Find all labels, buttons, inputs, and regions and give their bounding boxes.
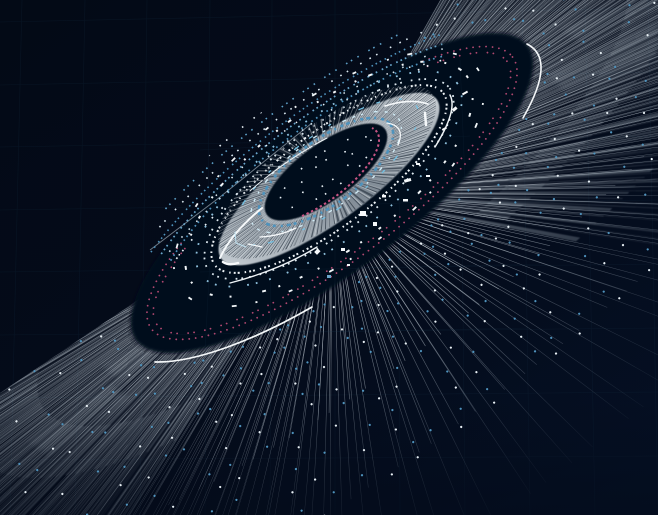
ring body bbox=[197, 66, 461, 292]
faint grid inside disc bbox=[160, 60, 540, 350]
pink inner arc bbox=[302, 128, 379, 216]
white outer arcs bbox=[155, 44, 541, 362]
bright flakes bbox=[314, 91, 468, 278]
bright ring highlights bbox=[220, 101, 428, 264]
ring hole bbox=[250, 106, 402, 238]
arc upper right bbox=[523, 44, 541, 118]
dark central disc bbox=[89, 0, 575, 403]
thin line across particle cloud bbox=[150, 123, 312, 250]
ring blue flecks bbox=[214, 76, 438, 268]
particle cloud upper left bbox=[150, 32, 443, 262]
dotted halo around ring bbox=[134, 5, 524, 353]
arc lower left bbox=[155, 307, 312, 362]
ring radial hatching bbox=[220, 79, 434, 265]
lower fade of rays bbox=[0, 400, 658, 515]
outer tech arcs around ring bbox=[230, 95, 452, 283]
central ring bbox=[197, 66, 461, 292]
particles inside hole bbox=[271, 125, 381, 219]
pink dotted rings bbox=[146, 46, 518, 340]
